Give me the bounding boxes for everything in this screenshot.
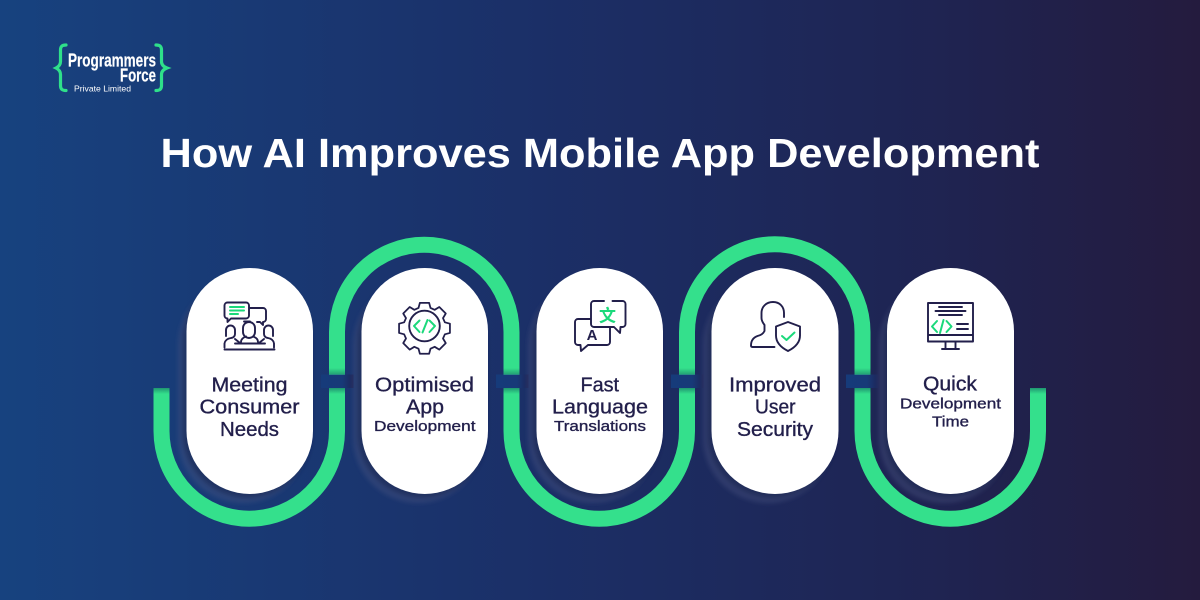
icon: translation bubbles: A (587, 327, 598, 344)
text: Optimised (375, 374, 474, 396)
track shading (154, 368, 1046, 394)
logo: Programmers Force: Force (120, 66, 156, 86)
text: Translations (554, 418, 646, 435)
icon: team meeting (224, 302, 274, 350)
text (374, 374, 476, 435)
text (552, 374, 648, 435)
icon: translation bubbles: 文 (599, 306, 616, 326)
text: Quick (923, 374, 978, 396)
logo: Programmers Force: Programmers (68, 50, 156, 70)
connector tabs (321, 374, 878, 388)
icon: monitor with code (928, 303, 973, 349)
panel: Optimised App Development (362, 268, 488, 494)
panel: Quick Development Time (887, 268, 1014, 494)
text (729, 374, 821, 441)
text: App (406, 396, 444, 418)
icon: gear with code (399, 303, 450, 354)
text: Improved (729, 374, 821, 396)
text: Meeting (212, 374, 288, 396)
text: User (755, 396, 796, 418)
logo: Programmers Force (56, 45, 167, 94)
icon: user with shield (751, 302, 800, 351)
panel: Meeting Consumer Needs (186, 268, 313, 494)
text: Development (374, 418, 476, 435)
pill shadows (178, 276, 1013, 503)
text: Time (932, 414, 969, 430)
text: Consumer (200, 396, 300, 418)
panel: Fast Language Translations (536, 268, 663, 494)
green winding track (162, 244, 1038, 519)
text: Language (552, 396, 648, 418)
text (900, 374, 1002, 430)
text: Development (900, 396, 1002, 412)
text: Fast (580, 374, 619, 396)
text: Security (737, 419, 813, 441)
panel: Improved User Security (712, 268, 838, 494)
text (200, 374, 300, 441)
title: How AI Improves Mobile App Development (160, 130, 1040, 176)
text: Needs (220, 419, 279, 441)
logo: Programmers Force: Private Limited (74, 84, 131, 94)
icon: translation bubbles (575, 301, 626, 351)
